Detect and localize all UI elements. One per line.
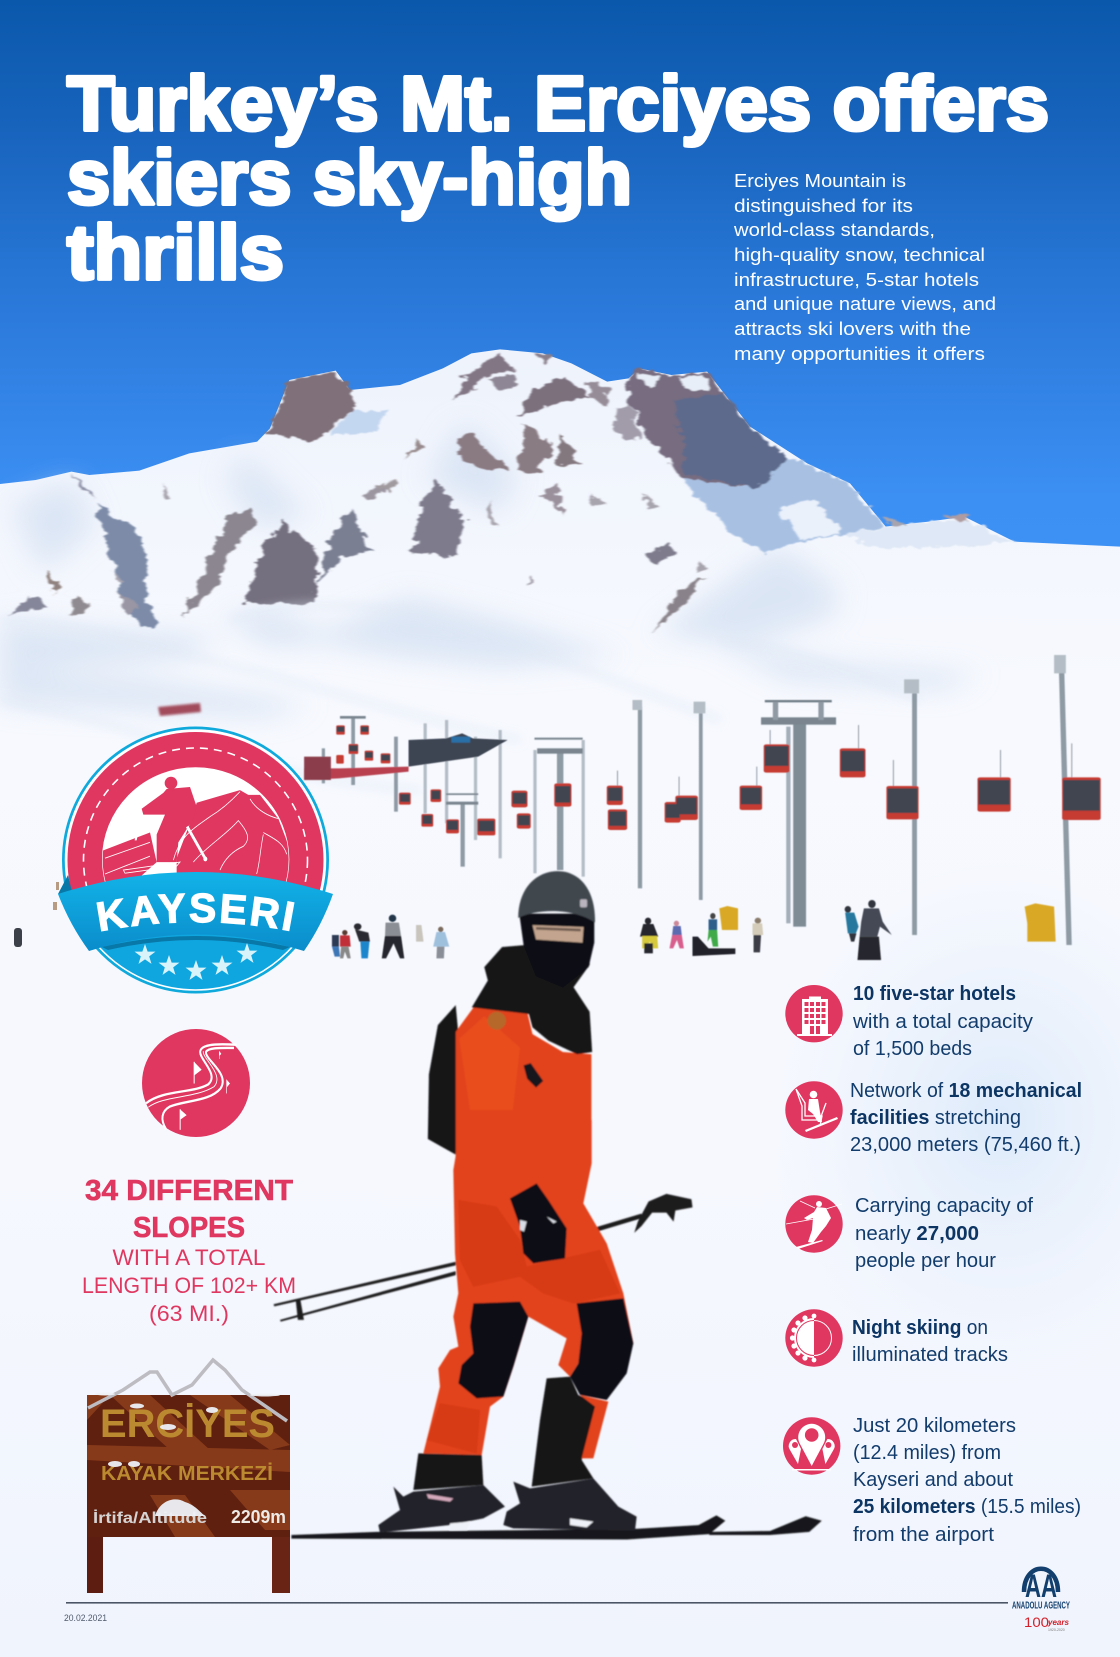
Anadolu Agency logo: AA [1025,1568,1057,1604]
fact: hotels: with a total capacity [852,1011,1033,1033]
date: 20.02.2021 [64,1613,107,1624]
slopes text: LENGTH OF 102+ KM [82,1273,296,1298]
fact: hotels: of 1,500 beds [853,1038,972,1060]
skis [291,1515,725,1539]
boots [378,1485,505,1533]
icon: winding slope [142,1029,250,1137]
snow cannons [719,903,1056,942]
lower blue segment [100,934,291,990]
fact: night skiing: illuminated tracks [852,1344,1008,1366]
intro text: distinguished for its [734,195,913,216]
Erciyes wooden sign: KAYAK MERKEZİ [101,1462,273,1485]
balaclava [519,914,594,987]
collar and yoke [472,945,592,1054]
slopes text: SLOPES [133,1212,245,1244]
fact: carrying capacity: Carrying capacity of [855,1195,1033,1217]
Anadolu Agency logo [1012,1568,1070,1632]
title: thrills [67,210,284,296]
upper orange suit [456,1007,591,1164]
five stars [135,943,257,980]
backpack [428,1005,463,1155]
slopes text [82,1175,296,1326]
dashed ring [84,748,308,972]
fact: mechanical facilities [850,1080,1082,1156]
icon: chair lift [785,1081,843,1139]
intro text: attracts ski lovers with the [734,318,971,339]
intro text: world-class standards, [733,219,935,240]
glove [510,1183,567,1263]
helmet [518,871,595,923]
skier photo figure [274,871,822,1539]
slopes text: (63 MI.) [149,1301,229,1326]
lift poles [322,655,1072,945]
distant cabin and far-left skiers [14,703,201,947]
Kayseri badge [58,726,333,994]
Erciyes wooden sign: ERCİYES [100,1402,275,1446]
ribbon [58,872,333,951]
Anadolu Agency logo: ANADOLU AGENCY [1012,1600,1070,1612]
fact: location: from the airport [853,1524,994,1546]
icon: hotel [785,985,843,1042]
title [67,61,1049,296]
Erciyes wooden sign: İrtifa/Altitude [93,1509,207,1527]
background: snowy mountain [0,349,1120,1657]
intro text: Erciyes Mountain is [734,170,906,191]
fact: location: Kayseri and about [853,1469,1013,1491]
fact: carrying capacity: nearly 27,000 [855,1223,979,1245]
knee panels [458,1302,528,1398]
lower orange suit [423,1120,633,1455]
footer rule [66,1602,1008,1604]
gondola cabins [336,725,1101,835]
Anadolu Agency logo: 100 [1024,1614,1049,1630]
title: Turkey’s Mt. Erciyes offers [67,61,1049,147]
inner scene [102,768,289,951]
Anadolu Agency logo: years [1047,1617,1069,1627]
right lower leg [532,1377,597,1487]
icon: day and night [785,1309,843,1367]
Anadolu Agency logo: 1920-2020 [1048,1628,1065,1632]
intro text: and unique nature views, and [734,293,996,314]
fact: mechanical facilities: Network of 18 mechanical [850,1080,1082,1102]
fact: hotels [852,983,1033,1060]
Kayseri badge: KAYSERI [96,892,294,932]
fact: location: (12.4 miles) from [853,1442,1001,1464]
intro text: high-quality snow, technical [734,244,985,265]
fact: night skiing: Night skiing on [852,1317,988,1339]
title: skiers sky-high [67,135,632,221]
fact: mechanical facilities: facilities stretching [850,1107,1021,1129]
intro text: infrastructure, 5-star hotels [734,269,979,290]
face [532,925,584,943]
icon: skier [785,1195,843,1253]
intro text [733,170,996,364]
ski poles [274,1194,692,1322]
Erciyes wooden sign [87,1360,290,1593]
slopes text: 34 DIFFERENT [85,1175,293,1207]
lower body [378,1120,637,1533]
ribbon title [92,922,301,933]
background: sky gradient [0,0,1120,620]
fact: hotels: 10 five-star hotels [853,983,1016,1005]
fact: location: Just 20 kilometers [853,1415,1016,1437]
left gaiter [413,1453,483,1490]
fact: location: 25 kilometers (15.5 miles) [853,1496,1081,1518]
ribbon folds [58,875,72,894]
fact: mechanical facilities: 23,000 meters (75,460 ft.) [850,1134,1081,1156]
slopes text: WITH A TOTAL [112,1245,266,1270]
distant skiers [332,900,892,960]
gondola lift scene [304,655,1101,960]
fact: location [853,1415,1081,1546]
intro text: many opportunities it offers [734,343,985,364]
fact: carrying capacity: people per hour [855,1250,996,1272]
Erciyes wooden sign: 2209m [231,1507,286,1527]
upper body and poles [274,871,822,1539]
fact: night skiing [852,1317,1008,1366]
fact: carrying capacity [855,1195,1033,1272]
background: soft blue snow tint behind facts [770,860,1120,1380]
icon: location pins [783,1417,840,1475]
lift station [304,733,508,780]
background: snow slope shading [0,605,920,790]
